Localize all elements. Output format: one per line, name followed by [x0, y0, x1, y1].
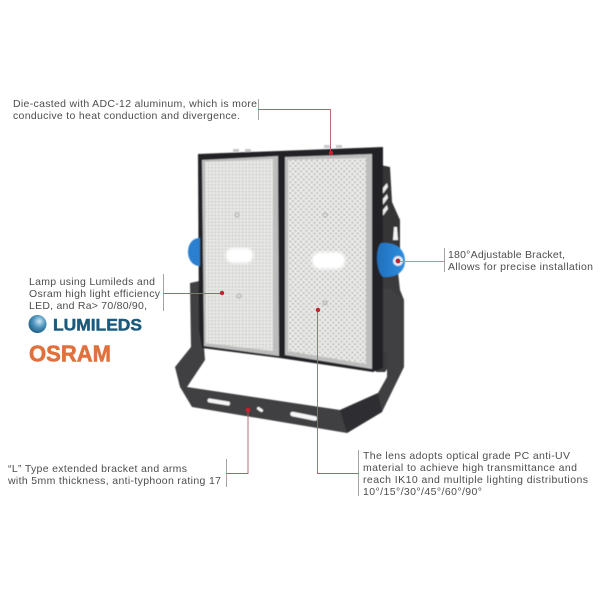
- right lens panel: [285, 154, 372, 369]
- logo: Lumileds: LUMILEDS: [53, 316, 142, 334]
- right bright LED: [312, 252, 345, 269]
- left lens panel: [202, 156, 279, 356]
- product: floodlight: [175, 145, 405, 433]
- bracket mounting slots: [210, 400, 315, 418]
- callout: adjustable bracket: [396, 248, 593, 273]
- housing frame: [198, 147, 383, 372]
- callout: extended bracket: with 5mm thickness, anti-typhoon rating 17: [7, 475, 221, 487]
- callout: lens: The lens adopts optical grade PC anti-UV: [363, 450, 570, 462]
- callout: adjustable bracket: 180°Adjustable Bracket,: [448, 249, 565, 261]
- right blue knob: [377, 243, 405, 277]
- callout: die-cast housing: Die-casted with ADC-12 aluminum, which is more: [13, 98, 257, 110]
- callout: die-cast housing: conducive to heat conduction and divergence.: [13, 110, 240, 122]
- right side mount plate: [376, 164, 404, 372]
- left blue knob: [188, 238, 200, 266]
- callout: LED lamps: [29, 274, 224, 312]
- callout: die-cast housing: [13, 98, 333, 155]
- L-type bracket: [175, 280, 404, 433]
- callout: lens: reach IK10 and multiple lighting distributions: [363, 474, 588, 486]
- bracket front facet shading: [340, 393, 382, 433]
- logo: Osram: OSRAM: [29, 340, 111, 366]
- left bright LED: [226, 248, 253, 263]
- top clips: [233, 145, 342, 152]
- callout: lens: material to achieve high transmittance and: [363, 462, 577, 474]
- callout: extended bracket: “L” Type extended bracket and arms: [8, 463, 187, 475]
- callout: lens: [316, 308, 588, 498]
- callout: LED lamps: Osram high light efficiency: [29, 288, 161, 300]
- callout: lens: 10°/15°/30°/45°/60°/90°: [363, 486, 482, 498]
- callout: extended bracket: [7, 408, 250, 487]
- callout: LED lamps: Lamp using Lumileds and: [29, 276, 155, 288]
- callout: adjustable bracket: Allows for precise installation: [448, 261, 593, 273]
- callout: LED lamps: LED, and Ra> 70/80/90,: [29, 300, 147, 312]
